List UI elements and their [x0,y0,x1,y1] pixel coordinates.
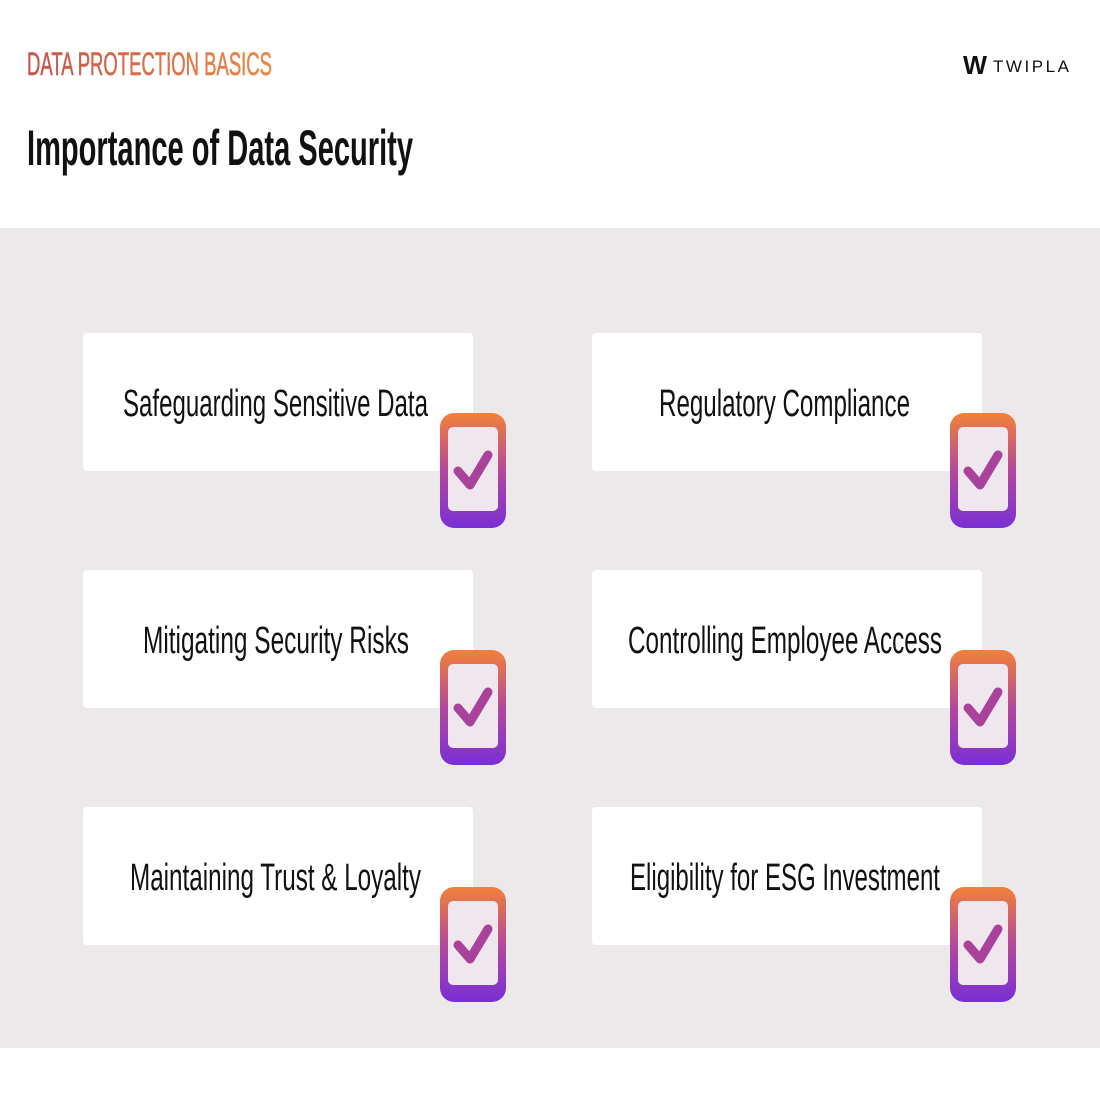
title: Importance of Data Security [27,120,413,176]
icon: check 1 [440,413,506,528]
icon: check 4 [950,650,1016,765]
card: Safeguarding Sensitive Data [83,333,473,471]
card: Safeguarding Sensitive Data: Safeguarding Sensitive Data [123,383,429,425]
card: Maintaining Trust & Loyalty [83,807,473,945]
icon: check 5 [440,887,506,1002]
card: Mitigating Security Risks [83,570,473,708]
logo: W [963,50,987,80]
panel: background [0,228,1100,1048]
card: Mitigating Security Risks: Mitigating Security Risks [143,620,409,662]
card: Controlling Employee Access [592,570,982,708]
card: Regulatory Compliance: Regulatory Compliance [659,383,910,425]
icon: check 6 [950,887,1016,1002]
logo: TWIPLA [993,57,1070,76]
logo [963,50,1070,80]
card: Regulatory Compliance [592,333,982,471]
icon: check 2 [950,413,1016,528]
card: Eligibility for ESG Investment [592,807,982,945]
card: Maintaining Trust & Loyalty: Maintaining Trust & Loyalty [130,857,421,899]
header label: DATA PROTECTION BASICS [27,46,272,82]
icon: check 3 [440,650,506,765]
